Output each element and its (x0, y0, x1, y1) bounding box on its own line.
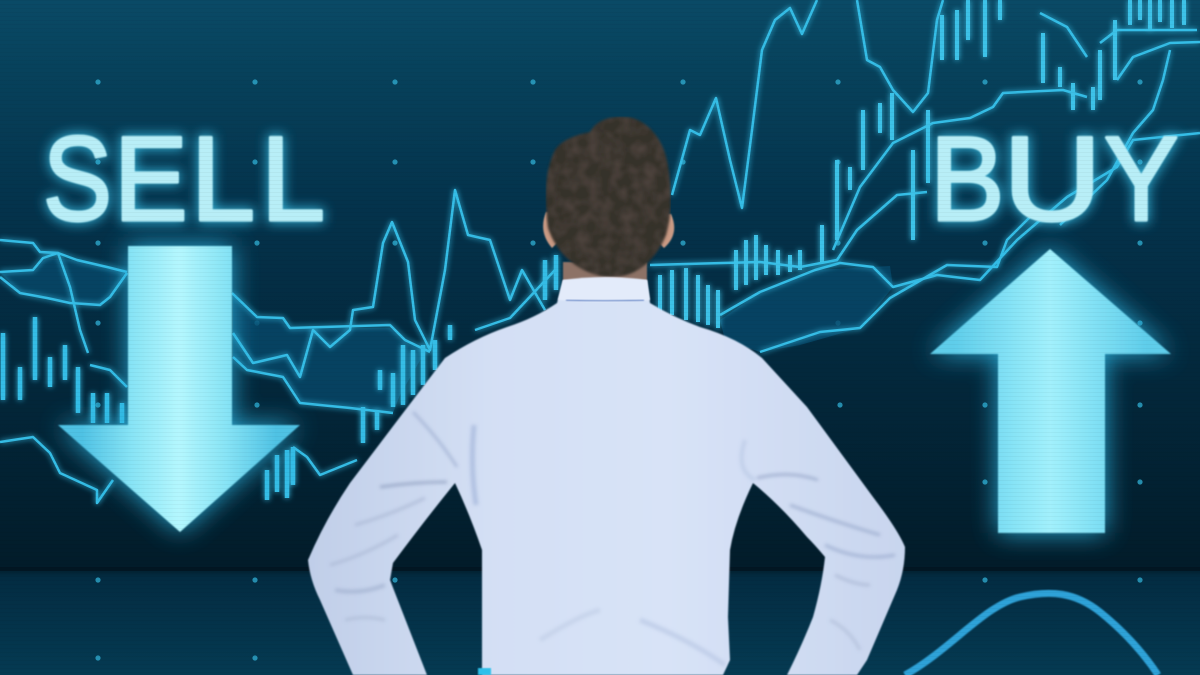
label: BUY: Y (1104, 111, 1178, 246)
chart: right price lines (650, 0, 1200, 352)
chart: bottom right curve (905, 593, 1158, 675)
label: SELL: E (114, 113, 188, 246)
label: SELL: E (114, 113, 188, 246)
label: BUY: B (930, 111, 1004, 246)
person seen from behind (308, 117, 905, 675)
chart: shaded cloud bands (0, 258, 893, 413)
label: BUY: B (930, 111, 1004, 246)
cyan chart fragment at waist (478, 668, 491, 675)
label: SELL: L (261, 112, 325, 246)
hair (546, 117, 671, 277)
label: SELL: S (43, 112, 112, 246)
label: SELL: L (261, 112, 325, 246)
label: BUY (930, 111, 1178, 246)
grid dots (95, 79, 1143, 661)
shirt folds (330, 412, 895, 665)
label: SELL: L (191, 112, 255, 246)
chart: right candlesticks (660, 0, 1184, 328)
label: SELL (43, 112, 325, 246)
label: SELL: L (191, 112, 255, 246)
chart: left candlesticks (3, 255, 556, 500)
chart: left price lines (0, 190, 555, 503)
ears (543, 212, 674, 248)
label: BUY: U (1003, 113, 1102, 246)
shirt (308, 280, 905, 675)
arrow: buy up (930, 249, 1171, 533)
label: BUY: U (1003, 113, 1102, 246)
arrow: sell down (58, 246, 300, 532)
collar (558, 277, 650, 302)
label: BUY: Y (1104, 111, 1178, 246)
label: SELL: S (43, 112, 112, 246)
neck (563, 262, 647, 285)
